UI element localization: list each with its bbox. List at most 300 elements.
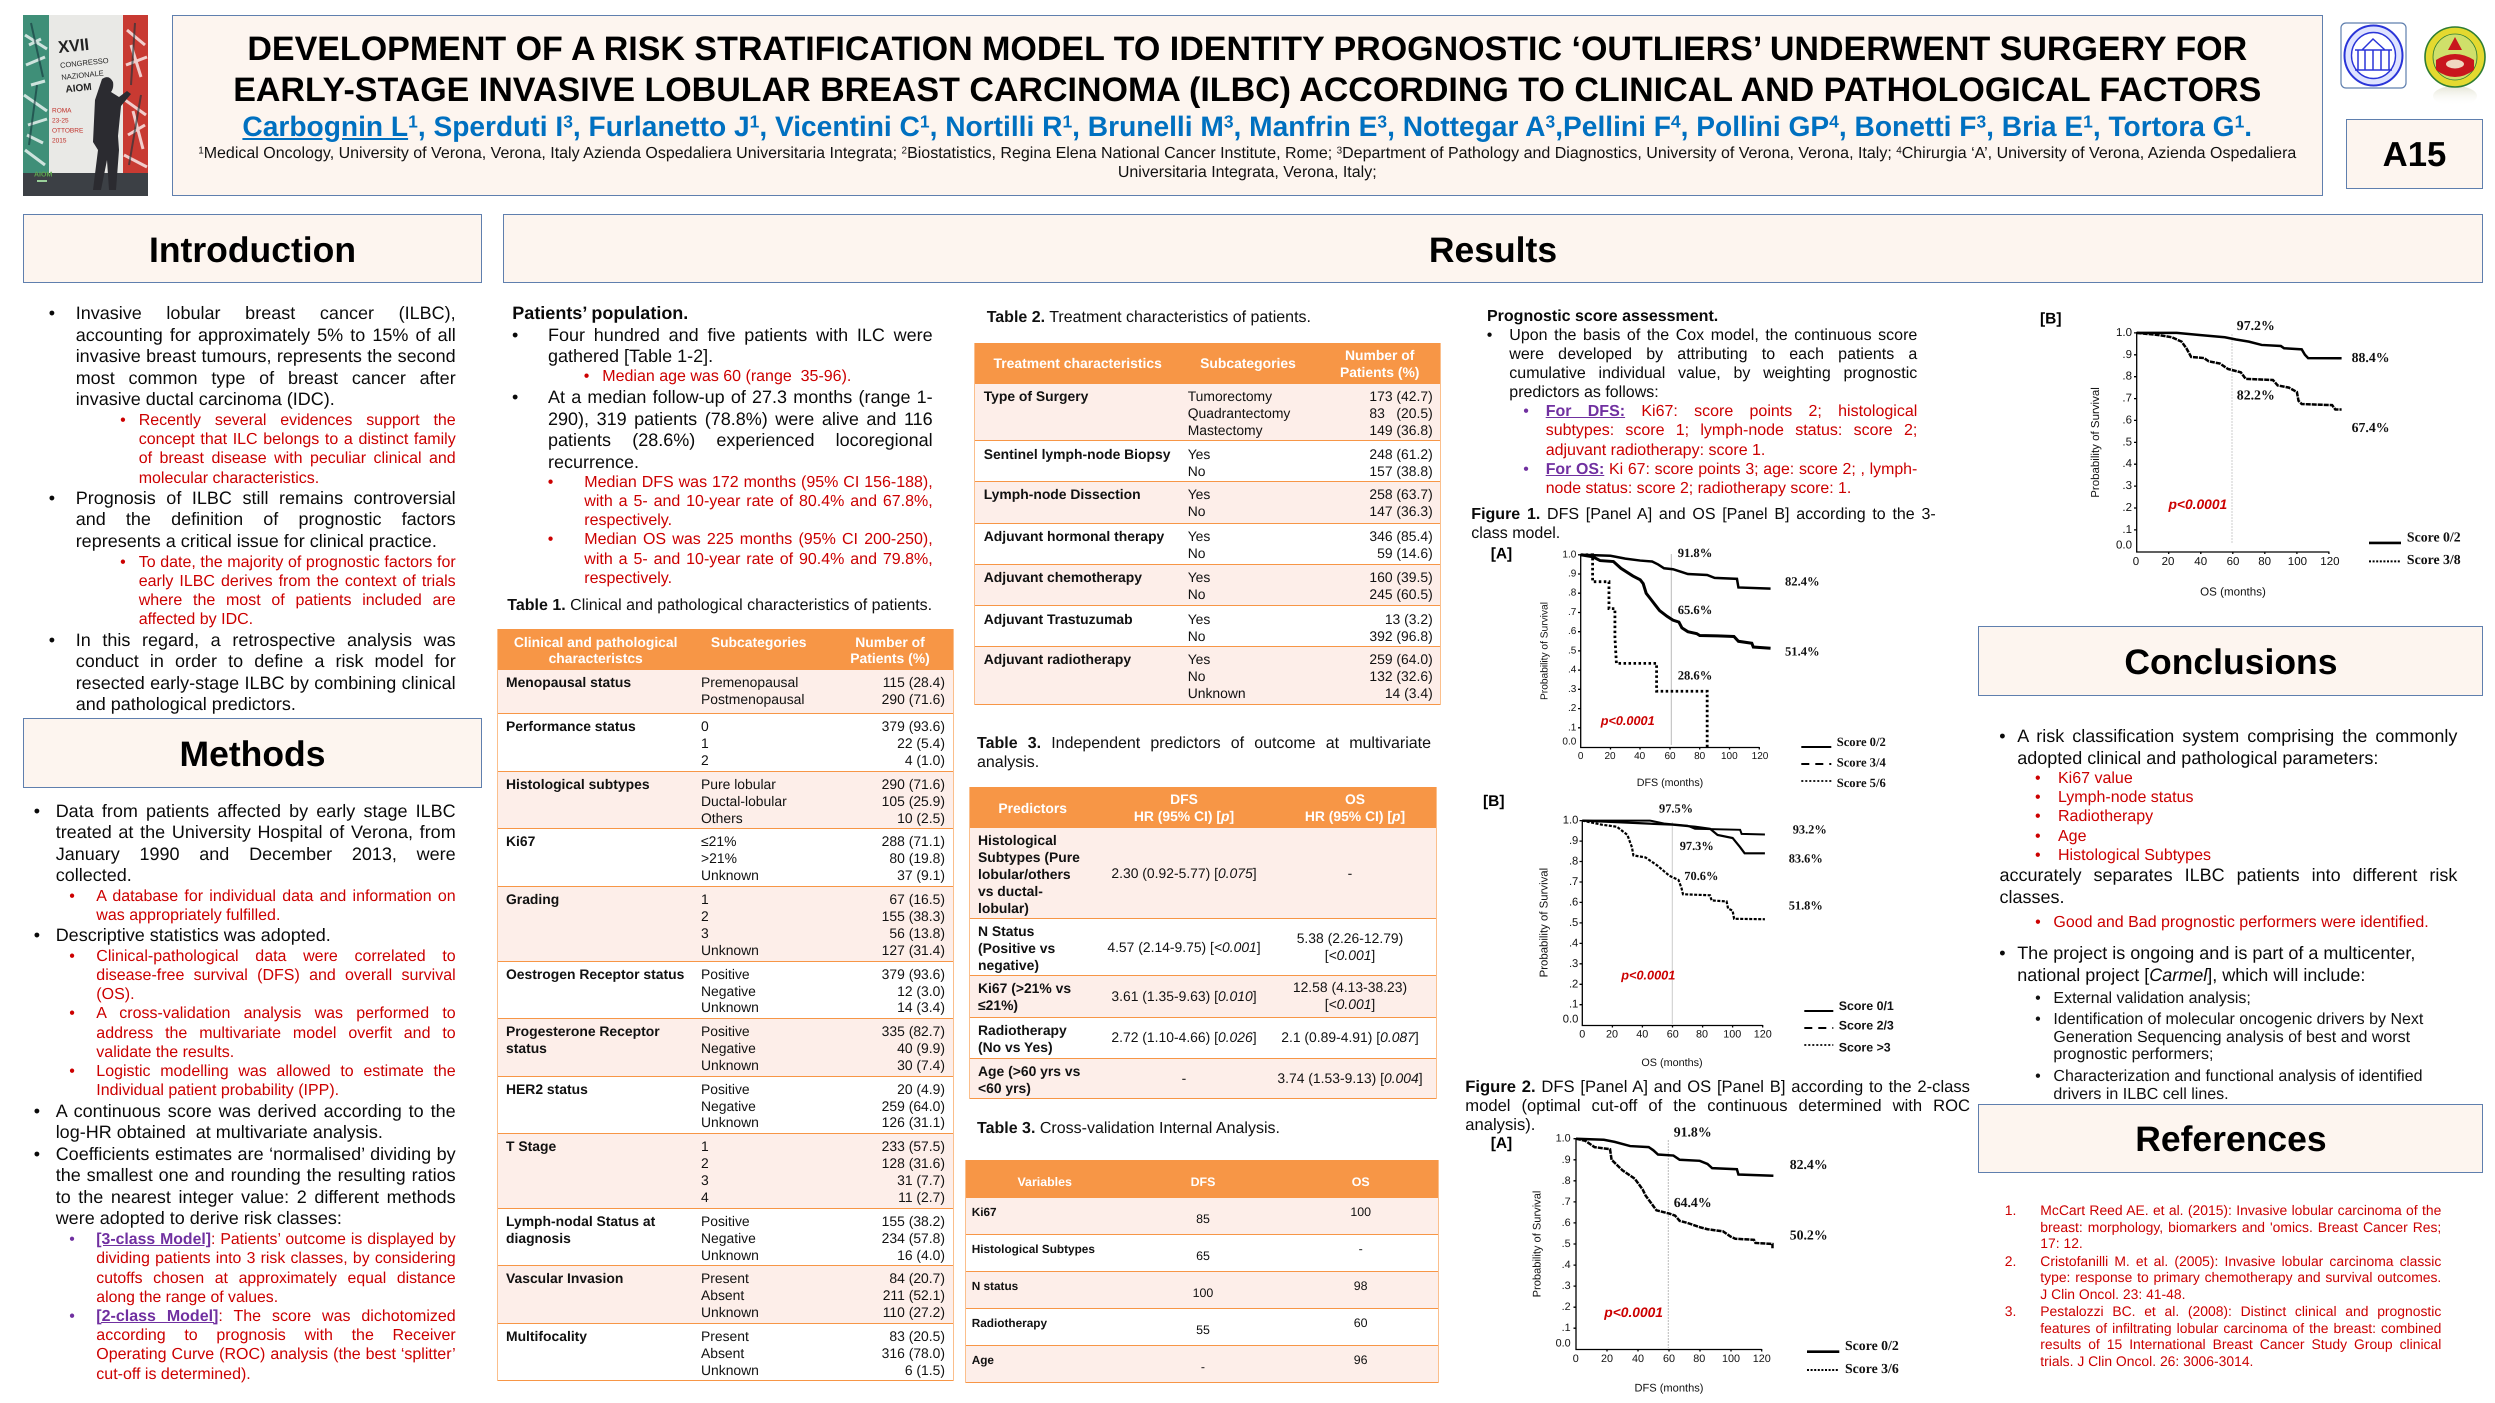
survival percentages: 93.2% bbox=[1793, 822, 1827, 836]
row: vascular invasion bbox=[498, 1266, 953, 1324]
x axis labels: 0 bbox=[1579, 1028, 1585, 1040]
row: histological subtypes: vs ductal- bbox=[978, 883, 1043, 899]
row: N status bbox=[970, 919, 1436, 976]
text: prognostic score assessment: • bbox=[1523, 403, 1529, 420]
sub-bullet: 2-class model: [2-class Model]: The score was dichotomized according to prognosis with the Receiver Operating Curve (ROC) analysis (the best ‘splitter’ cut-off is determined). bbox=[96, 1308, 456, 1383]
row: lymph-node dissection: Lymph-node Dissection bbox=[984, 486, 1141, 502]
bullet: ongoing project bbox=[2017, 943, 2415, 986]
table header: Variables bbox=[1017, 1175, 1072, 1189]
row: oestrogen receptor: Positive bbox=[701, 966, 750, 982]
chart: figure 2 panel B, OS 2-class model bbox=[2030, 305, 2475, 605]
x axis labels: 20 bbox=[1601, 1353, 1613, 1365]
table header: Patients (%) bbox=[850, 650, 930, 666]
legend bbox=[1807, 1338, 1899, 1376]
y axis labels: .3 bbox=[1569, 958, 1578, 970]
table header: Subcategories bbox=[1200, 355, 1296, 371]
row: performance status: Performance status bbox=[506, 718, 636, 734]
image: congress poster AIOM: AIOM bbox=[65, 82, 92, 95]
sub-bullet: correlation: Clinical-pathological data were correlated to disease-free survival (DFS) and overall survival (OS). bbox=[96, 948, 456, 1003]
row: grading: Unknown bbox=[701, 942, 759, 958]
row: adjuvant trastuzumab: Adjuvant Trastuzumab bbox=[984, 611, 1133, 627]
row: adjuvant hormonal therapy: 346 (85.4) bbox=[1369, 528, 1433, 544]
row: lymph-nodal status: 16 (4.0) bbox=[897, 1247, 945, 1263]
curve: score greater than 3 bbox=[1582, 821, 1765, 919]
section header: Methods: Methods bbox=[180, 734, 325, 774]
curve: score 3/8 bbox=[2137, 333, 2342, 410]
subheading: prognostic score: Prognostic score assessment. bbox=[1487, 308, 1718, 325]
y axis labels: 0.0 bbox=[1556, 1338, 1571, 1350]
text: methods bullets: • bbox=[69, 888, 75, 905]
legend: Score 3/4 bbox=[1837, 755, 1886, 769]
legend: Score 3/8 bbox=[2407, 552, 2461, 567]
survival percentages: 65.6% bbox=[1678, 603, 1712, 617]
row: lymph-nodal status: diagnosis bbox=[506, 1230, 571, 1246]
x axis labels: 60 bbox=[1667, 1028, 1679, 1040]
row: histological subtypes: Ductal-lobular bbox=[701, 793, 787, 809]
text: methods bullets: • bbox=[34, 1101, 40, 1121]
sub-bullet: molecular drivers bbox=[2053, 1011, 2423, 1064]
row: lymph-node dissection: No bbox=[1188, 503, 1205, 519]
list: model parameters: Radiotherapy bbox=[2058, 808, 2153, 825]
row: N status bbox=[966, 1272, 1438, 1309]
y axis labels: 1.0 bbox=[1556, 1133, 1571, 1145]
row: type of surgery: Type of Surgery bbox=[984, 388, 1088, 404]
row: Ki67 bbox=[966, 1198, 1438, 1234]
row: adjuvant trastuzumab bbox=[975, 606, 1440, 647]
row: oestrogen receptor: Unknown bbox=[701, 999, 759, 1015]
text: patients' population: • bbox=[512, 387, 518, 407]
table header: OS bbox=[1352, 1175, 1370, 1189]
y axis labels bbox=[1563, 815, 1578, 1026]
row: T stage: 4 bbox=[701, 1189, 709, 1205]
chart: figure 1 panel A, DFS 3-class model bbox=[1491, 545, 1886, 790]
y axis labels: .8 bbox=[1569, 856, 1578, 868]
row: oestrogen receptor: Negative bbox=[701, 983, 756, 999]
panel tag A: [A] bbox=[1491, 545, 1512, 562]
text: conclusions: • bbox=[2035, 990, 2041, 1006]
text: patients' population: • bbox=[584, 368, 589, 385]
bullet: ILBC definition: Invasive lobular breast cancer (ILBC), accounting for approximately 5% to 15% of all invasive breast tumours, represents the second most common type of breast cancer after invasive ductal carcinoma (IDC). bbox=[76, 303, 456, 409]
y axis labels: .2 bbox=[1568, 703, 1577, 714]
caption: figure 2: Figure 2. DFS [Panel A] and OS [Panel B] according to the 2-class model (optimal cut-off of the continuous determined with ROC analysis). bbox=[1465, 1077, 1970, 1134]
row: N status: 100 bbox=[1193, 1286, 1213, 1300]
axes bbox=[2134, 332, 2329, 554]
row: progesterone receptor: 40 (9.9) bbox=[897, 1040, 945, 1056]
row: histological subtypes: Histological Subtypes bbox=[972, 1242, 1095, 1256]
60-month reference line bbox=[1670, 554, 1672, 745]
row: type of surgery: Mastectomy bbox=[1188, 422, 1263, 438]
row: Ki67: >21% bbox=[701, 850, 737, 866]
x axis labels: 100 bbox=[1722, 1353, 1740, 1365]
row: histological subtypes bbox=[498, 772, 953, 829]
x axis labels: 40 bbox=[2194, 556, 2207, 568]
row: grading: 155 (38.3) bbox=[882, 908, 945, 924]
row: adjuvant trastuzumab: 13 (3.2) bbox=[1385, 611, 1433, 627]
text: references list: 1. bbox=[2005, 1202, 2016, 1218]
survival curves bbox=[2137, 333, 2342, 410]
row: HER2: Unknown bbox=[701, 1114, 759, 1130]
row: radiotherapy: Radiotherapy bbox=[972, 1316, 1047, 1330]
row: adjuvant radiotherapy: Yes bbox=[1188, 651, 1210, 667]
y axis labels: .4 bbox=[1569, 937, 1578, 949]
row: oestrogen receptor: 12 (3.0) bbox=[897, 983, 945, 999]
table header: Treatment characteristics bbox=[994, 355, 1162, 371]
y axis labels: .1 bbox=[1568, 722, 1577, 733]
row: adjuvant hormonal therapy: Adjuvant hormonal therapy bbox=[984, 528, 1164, 544]
text: separates patients: accurately separates ILBC patients into different risk classes. bbox=[2000, 865, 2457, 907]
title line 1: DEVELOPMENT OF A RISK STRATIFICATION MODEL TO IDENTITY PROGNOSTIC ‘OUTLIERS’ UNDERWENT SURGERY FOR bbox=[247, 30, 2247, 68]
row: Ki67: 288 (71.1) bbox=[882, 833, 945, 849]
row: type of surgery bbox=[975, 384, 1440, 441]
row: histological subtypes: lobular) bbox=[978, 900, 1029, 916]
text: methods bullets bbox=[34, 801, 456, 1383]
survival percentages bbox=[1678, 546, 1820, 683]
survival percentages: 83.6% bbox=[1789, 851, 1823, 865]
text: conclusions: • bbox=[2035, 770, 2041, 787]
survival percentages: 88.4% bbox=[2352, 350, 2390, 365]
row: vascular invasion: 211 (52.1) bbox=[883, 1287, 945, 1303]
row: grading: 3 bbox=[701, 925, 709, 941]
row: progesterone receptor: Negative bbox=[701, 1040, 756, 1056]
bullet: descriptive statistics: Descriptive statistics was adopted. bbox=[56, 925, 331, 945]
y axis labels: .4 bbox=[2122, 458, 2133, 470]
text: references list bbox=[2000, 1195, 2450, 1375]
table header: DFS bbox=[1191, 1175, 1215, 1189]
text: patients' population: • bbox=[548, 531, 553, 548]
table header: Subcategories bbox=[711, 634, 807, 650]
survival percentages bbox=[1659, 801, 1827, 912]
axes bbox=[1578, 554, 1759, 750]
y axis labels: .8 bbox=[1568, 588, 1577, 599]
row: grading: 1 bbox=[701, 891, 709, 907]
chart: figure 2 panel A, DFS 2-class model bbox=[1480, 1122, 1910, 1400]
row: adjuvant hormonal therapy: No bbox=[1188, 545, 1205, 561]
text: introduction bullets bbox=[49, 303, 456, 714]
row: grading: 67 (16.5) bbox=[889, 891, 945, 907]
y axis labels: .6 bbox=[1569, 896, 1578, 908]
table header: Clinical and pathological bbox=[514, 634, 678, 650]
section header: Introduction: Introduction bbox=[149, 230, 356, 270]
y axis labels: .2 bbox=[1562, 1301, 1571, 1313]
affiliations bbox=[198, 145, 2296, 181]
sub-bullet: functional analysis bbox=[2053, 1068, 2422, 1103]
row: adjuvant hormonal therapy: Yes bbox=[1188, 528, 1210, 544]
x axis labels: 0 bbox=[2133, 556, 2139, 568]
row: N status: 98 bbox=[1354, 1279, 1368, 1293]
row: performance status: 0 bbox=[701, 718, 709, 734]
sub-bullet: performers identified: Good and Bad prognostic performers were identified. bbox=[2053, 914, 2429, 931]
row: performance status: 379 (93.6) bbox=[882, 718, 945, 734]
row: Ki67: 3.61 (1.35-9.63) [0.010] bbox=[1111, 988, 1257, 1004]
row: adjuvant trastuzumab: 392 (96.8) bbox=[1369, 628, 1433, 644]
bullet: ongoing project: national project [Carmel], which will include: bbox=[2017, 965, 2365, 985]
y axis labels: 0.0 bbox=[2116, 540, 2132, 552]
y axis labels: .1 bbox=[1569, 999, 1578, 1011]
list: model parameters: Age bbox=[2058, 828, 2086, 845]
row: radiotherapy bbox=[970, 1018, 1436, 1058]
y axis labels: .5 bbox=[2122, 436, 2132, 448]
x axis labels: 100 bbox=[1723, 1028, 1741, 1040]
row: T stage: 11 (2.7) bbox=[898, 1189, 945, 1205]
y axis labels: 1.0 bbox=[2116, 327, 2132, 339]
x axis labels: 20 bbox=[1604, 751, 1616, 762]
legend: Score 2/3 bbox=[1839, 1019, 1894, 1033]
row: adjuvant hormonal therapy bbox=[975, 524, 1440, 565]
y axis labels: 0.0 bbox=[1563, 1014, 1578, 1026]
row: Ki67: Unknown bbox=[701, 867, 759, 883]
survival percentages: 64.4% bbox=[1674, 1195, 1712, 1210]
text: conclusions: • bbox=[2035, 1011, 2041, 1028]
row: multifocality: 83 (20.5) bbox=[889, 1328, 945, 1344]
survival percentages: 97.3% bbox=[1680, 839, 1714, 853]
text: prognostic score assessment bbox=[1487, 308, 1918, 497]
authors: Carbognin L1, Sperduti I3, Furlanetto J1, Vicentini C1, Nortilli R1, Brunelli M3, Manfrin E3, Nottegar A3,Pellini F4, Pollini GP4, Bonetti F3, Bria E1, Tortora G1. bbox=[242, 111, 2252, 142]
row: age: Age bbox=[972, 1353, 994, 1367]
row: histological subtypes: 10 (2.5) bbox=[897, 810, 945, 826]
row: adjuvant radiotherapy: No bbox=[1188, 668, 1205, 684]
curve: score 0/2 bbox=[1581, 555, 1771, 589]
y axis labels: .7 bbox=[2122, 393, 2132, 405]
x axis labels bbox=[1579, 1028, 1772, 1040]
row: lymph-nodal status: Positive bbox=[701, 1213, 750, 1229]
row: type of surgery: 149 (36.8) bbox=[1369, 422, 1433, 438]
text: conclusions: • bbox=[1999, 943, 2006, 963]
bullet: Cox model: Upon the basis of the Cox model, the continuous score were developed by attributing to each patients a cumulative individual value, by weighting prognostic predictors as follows: bbox=[1509, 327, 1917, 401]
caption: table 3 cross-validation: Table 3. Cross-validation Internal Analysis. bbox=[977, 1120, 1280, 1137]
row: HER2: 20 (4.9) bbox=[897, 1081, 945, 1097]
x axis labels: 0 bbox=[1573, 1353, 1579, 1365]
section header: Results bbox=[503, 214, 2483, 283]
y axis labels: 1.0 bbox=[1563, 815, 1578, 827]
row: adjuvant radiotherapy: 259 (64.0) bbox=[1369, 651, 1433, 667]
survival percentages: 67.4% bbox=[2352, 420, 2390, 435]
reference 1: McCart Reed AE. et al. (2015): Invasive lobular carcinoma of the breast: morphology, biomarkers and 'omics. Breast Cancer Res; 17: 12. bbox=[2040, 1202, 2441, 1251]
y axis labels: .6 bbox=[2122, 414, 2132, 426]
row: menopausal status: 115 (28.4) bbox=[883, 674, 945, 690]
x axis labels: 120 bbox=[2320, 556, 2339, 568]
row: sentinel biopsy: Sentinel lymph-node Biopsy bbox=[984, 446, 1170, 462]
text: references list: 2. bbox=[2005, 1253, 2016, 1269]
y axis labels: .9 bbox=[1568, 568, 1577, 580]
image: congress poster AIOM: OTTOBRE bbox=[52, 128, 84, 134]
y axis labels: .7 bbox=[1562, 1196, 1571, 1208]
bullet: ongoing project: The project is ongoing and is part of a multicenter, bbox=[2017, 943, 2415, 963]
row: sentinel biopsy: Yes bbox=[1188, 446, 1210, 462]
row: lymph-node dissection: 258 (63.7) bbox=[1369, 486, 1433, 502]
row: N status: 5.38 (2.26-12.79) bbox=[1297, 930, 1403, 946]
panel tag B: [B] bbox=[2040, 310, 2062, 328]
curve: score 0/1 bbox=[1582, 821, 1765, 835]
row: N status: N status bbox=[972, 1279, 1018, 1293]
x axis title: OS (months) bbox=[2200, 586, 2266, 598]
row: histological subtypes: - bbox=[1359, 1242, 1363, 1256]
legend: Score 5/6 bbox=[1837, 776, 1886, 790]
p value: p<0.0001 bbox=[1620, 969, 1675, 983]
bullet: retrospective analysis: In this regard, a retrospective analysis was conduct in order to define a risk model for resected early-stage ILBC by combining clinical and pathological predictors. bbox=[76, 630, 456, 714]
table header: HR (95% CI) [p] bbox=[1134, 808, 1234, 824]
sub-bullet: logistic modelling: Logistic modelling was allowed to estimate the Individual patient probability (IPP). bbox=[96, 1063, 456, 1099]
sub-bullet: median OS: Median OS was 225 months (95% CI 200-250), with a 5- and 10-year rate of 90.4% and 79.8%, respectively. bbox=[584, 531, 933, 587]
legend bbox=[1801, 735, 1886, 790]
row: radiotherapy: (No vs Yes) bbox=[978, 1039, 1053, 1055]
row: grading: 2 bbox=[701, 908, 709, 924]
row: lymph-node dissection: 147 (36.3) bbox=[1369, 503, 1433, 519]
caption: table 3 predictors: Table 3. Independent predictors of outcome at multivariate analysis. bbox=[977, 735, 1431, 771]
x axis labels bbox=[1578, 751, 1769, 762]
table header bbox=[966, 1160, 1438, 1198]
row: lymph-node dissection bbox=[975, 482, 1440, 524]
text: references list: 3. bbox=[2005, 1303, 2016, 1319]
row: multifocality: 6 (1.5) bbox=[905, 1362, 945, 1378]
text: conclusions: • bbox=[2035, 847, 2041, 864]
row: radiotherapy bbox=[966, 1309, 1438, 1346]
title line 2: EARLY-STAGE INVASIVE LOBULAR BREAST CARCINOMA (ILBC) ACCORDING TO CLINICAL AND PATHOLOGICAL FACTORS bbox=[233, 71, 2261, 109]
row: multifocality bbox=[498, 1324, 953, 1381]
row: HER2: 126 (31.1) bbox=[882, 1114, 945, 1130]
row: adjuvant radiotherapy: 14 (3.4) bbox=[1385, 685, 1433, 701]
y axis labels: .7 bbox=[1568, 607, 1577, 618]
row: grading: 56 (13.8) bbox=[889, 925, 945, 941]
row: performance status bbox=[498, 714, 953, 772]
row: Ki67: ≤21%) bbox=[978, 997, 1018, 1013]
x axis labels: 60 bbox=[1664, 751, 1676, 762]
survival percentages: 82.4% bbox=[1785, 574, 1820, 588]
row: histological subtypes: 65 bbox=[1196, 1248, 1210, 1262]
image: congress poster AIOM: 2015 bbox=[52, 138, 67, 144]
text: conclusions: • bbox=[1999, 726, 2006, 746]
section header: References: References bbox=[2135, 1119, 2327, 1159]
row: N status: 4.57 (2.14-9.75) [<0.001] bbox=[1107, 939, 1261, 955]
image: congress poster AIOM: CONGRESSO bbox=[60, 56, 109, 70]
row: adjuvant trastuzumab: Yes bbox=[1188, 611, 1210, 627]
panel tag B: [B] bbox=[1483, 793, 1505, 810]
list: model parameters: Ki67 value bbox=[2058, 770, 2133, 787]
row: lymph-nodal status: Lymph-nodal Status at bbox=[506, 1213, 655, 1229]
text: methods bullets: • bbox=[34, 801, 40, 821]
row: menopausal status bbox=[498, 670, 953, 714]
row: type of surgery: 83 (20.5) bbox=[1369, 405, 1433, 421]
row: progesterone receptor: Positive bbox=[701, 1023, 750, 1039]
row: vascular invasion: Vascular Invasion bbox=[506, 1270, 623, 1286]
text: methods bullets: • bbox=[34, 1144, 40, 1164]
affiliations: 1Medical Oncology, University of Verona, Verona, Italy Azienda Ospedaliera Universitaria Integrata; 2Biostatistics, Regina Elena National Cancer Institute, Rome; 3Department of Pathology and Diagnostics, University of Verona, Verona, Italy; 4Chirurgia ‘A’, University of Verona, Azienda Ospedaliera bbox=[198, 145, 2296, 162]
row: radiotherapy: 55 bbox=[1196, 1323, 1210, 1337]
x axis labels: 60 bbox=[2227, 556, 2239, 568]
row: progesterone receptor: 30 (7.4) bbox=[897, 1057, 945, 1073]
legend bbox=[1804, 999, 1894, 1055]
x axis title: DFS (months) bbox=[1634, 1382, 1704, 1394]
x axis labels: 80 bbox=[1696, 1028, 1708, 1040]
text: conclusions: • bbox=[2035, 914, 2041, 931]
y axis title: Probability of Survival bbox=[2090, 387, 2102, 498]
list: model parameters: Histological Subtypes bbox=[2058, 847, 2211, 864]
row: Ki67: Ki67 bbox=[506, 833, 535, 849]
legend: Score 0/1 bbox=[1839, 999, 1894, 1013]
sub-bullet: database: A database for individual data and information on was appropriately fulfilled. bbox=[96, 888, 456, 924]
section header: Conclusions: Conclusions bbox=[2124, 642, 2337, 682]
survival percentages: 97.2% bbox=[2237, 318, 2275, 333]
row: adjuvant chemotherapy: 245 (60.5) bbox=[1369, 586, 1433, 602]
y axis labels: .5 bbox=[1569, 917, 1578, 929]
table header: DFS bbox=[1170, 791, 1198, 807]
y axis labels: .4 bbox=[1568, 665, 1577, 676]
x axis title: DFS (months) bbox=[1637, 777, 1703, 789]
sub-bullet: functional analysis: drivers in ILBC cell lines. bbox=[2053, 1086, 2229, 1103]
row: histological subtypes: 290 (71.6) bbox=[882, 776, 945, 792]
x axis labels: 20 bbox=[1606, 1028, 1618, 1040]
row: adjuvant radiotherapy: Unknown bbox=[1188, 685, 1246, 701]
row: multifocality: Unknown bbox=[701, 1362, 759, 1378]
survival percentages bbox=[1674, 1124, 1828, 1242]
row: histological subtypes bbox=[966, 1234, 1438, 1272]
image: congress poster AIOM bbox=[23, 15, 148, 196]
image: congress poster AIOM: XVII bbox=[57, 35, 90, 57]
image: congress poster AIOM: 23-25 bbox=[52, 118, 69, 124]
survival curves bbox=[1582, 821, 1765, 919]
row: progesterone receptor: Unknown bbox=[701, 1057, 759, 1073]
sub-bullet: median DFS: Median DFS was 172 months (95% CI 156-188), with a 5- and 10-year rate of 80.4% and 67.8%, respectively. bbox=[584, 474, 933, 529]
row: age bbox=[970, 1058, 1436, 1099]
legend: Score 0/2 bbox=[1845, 1338, 1899, 1353]
row: histological subtypes: Subtypes (Pure bbox=[978, 849, 1080, 865]
curve: score 0/2 bbox=[2137, 333, 2342, 358]
row: type of surgery: Quadrantectomy bbox=[1188, 405, 1290, 421]
row: N status: negative) bbox=[978, 957, 1039, 973]
row: vascular invasion: Present bbox=[701, 1270, 749, 1286]
row: N status: (Positive vs bbox=[978, 940, 1055, 956]
x axis labels: 120 bbox=[1754, 1028, 1772, 1040]
section header: Introduction bbox=[23, 214, 482, 283]
text: prognostic score assessment: • bbox=[1487, 327, 1492, 344]
y axis labels: .5 bbox=[1568, 645, 1577, 656]
row: grading: 127 (31.4) bbox=[882, 942, 945, 958]
y axis labels: .8 bbox=[2122, 371, 2132, 383]
row: sentinel biopsy: 248 (61.2) bbox=[1369, 446, 1433, 462]
survival percentages: 91.8% bbox=[1674, 1124, 1712, 1140]
row: T stage: 128 (31.6) bbox=[882, 1155, 945, 1171]
row: Ki67: 37 (9.1) bbox=[897, 867, 945, 883]
survival percentages: 51.8% bbox=[1789, 898, 1823, 912]
row: T stage bbox=[498, 1134, 953, 1209]
row: Ki67: 80 (19.8) bbox=[889, 850, 945, 866]
row: lymph-nodal status: Unknown bbox=[701, 1247, 759, 1263]
row: T stage: 233 (57.5) bbox=[882, 1138, 945, 1154]
x axis labels: 60 bbox=[1663, 1353, 1675, 1365]
table header: characteristcs bbox=[549, 650, 643, 666]
row: histological subtypes: Pure lobular bbox=[701, 776, 776, 792]
survival percentages: 70.6% bbox=[1684, 869, 1718, 883]
row: Ki67: ≤21% bbox=[701, 833, 736, 849]
text: conclusions: • bbox=[2035, 828, 2041, 845]
table header bbox=[970, 787, 1436, 828]
x axis labels: 0 bbox=[1578, 751, 1584, 762]
text: introduction bullets: • bbox=[49, 630, 55, 650]
y axis title: Probability of Survival bbox=[1532, 1191, 1544, 1297]
row: performance status: 22 (5.4) bbox=[897, 735, 945, 751]
row: histological subtypes: lobular/others bbox=[978, 866, 1071, 882]
legend: Score 3/6 bbox=[1845, 1361, 1899, 1376]
axes bbox=[1574, 1138, 1762, 1352]
x axis labels: 80 bbox=[1694, 751, 1706, 762]
bullet: coefficients: Coefficients estimates are ‘normalised’ dividing by the smallest one and rounding the resulting ratios to the nearest integer value: 2 different methods were adopted to derive risk classes: bbox=[56, 1144, 456, 1228]
curve: score 5/6 bbox=[1581, 555, 1707, 747]
affiliations: Universitaria Integrata, Verona, Italy; bbox=[1118, 164, 1377, 181]
y axis labels bbox=[1562, 549, 1577, 748]
row: lymph-nodal status: Negative bbox=[701, 1230, 756, 1246]
legend: Score >3 bbox=[1839, 1041, 1891, 1055]
image: congress poster AIOM: ROMA bbox=[52, 108, 72, 114]
row: adjuvant hormonal therapy: 59 (14.6) bbox=[1377, 545, 1433, 561]
